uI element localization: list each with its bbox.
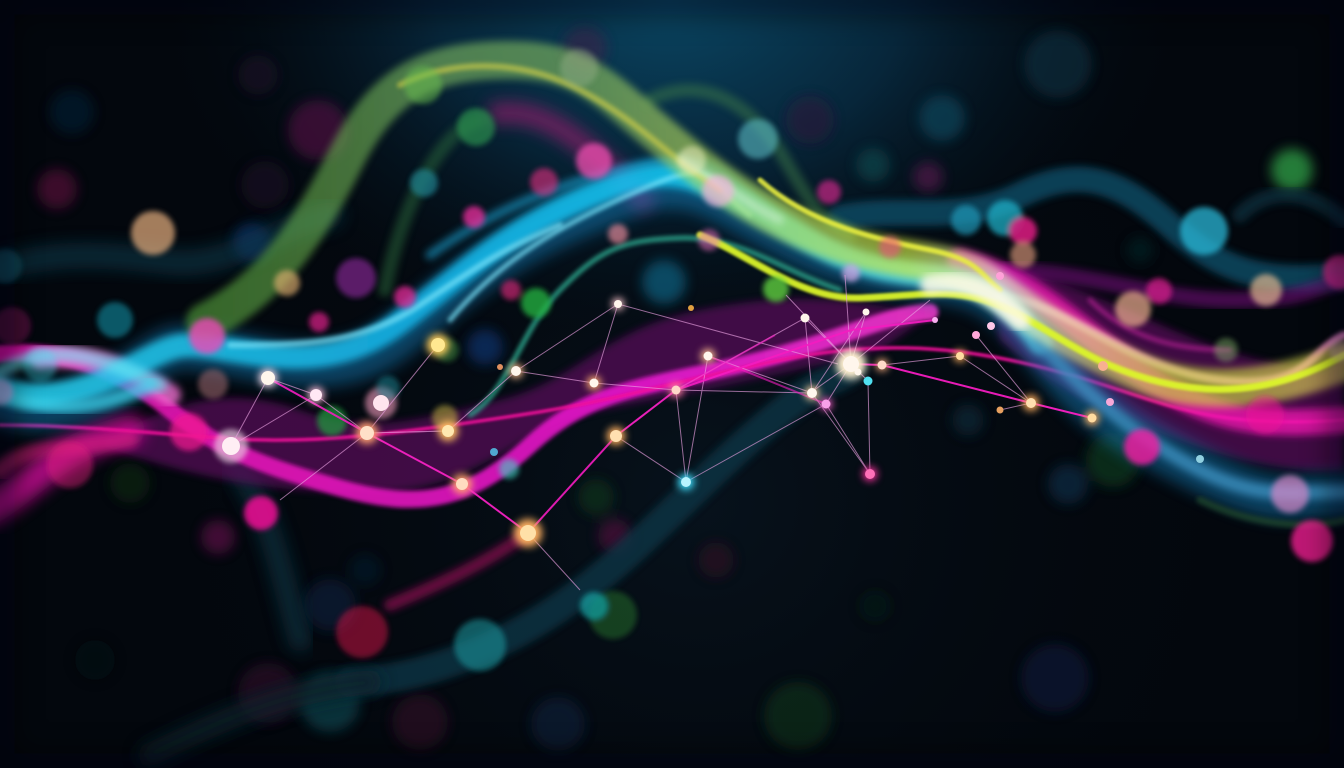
ribbon: magenta wave [0,262,1344,510]
ribbon: green and yellow wave [205,60,1344,525]
network bright magenta links [268,320,1092,533]
node cores [222,272,1204,541]
node glow halos [259,298,1099,547]
network nodes [222,272,1204,547]
network connection lines [231,275,1092,590]
ribbon: cyan wave [0,160,1344,498]
ribbon: purple translucent sheets [100,113,1344,492]
